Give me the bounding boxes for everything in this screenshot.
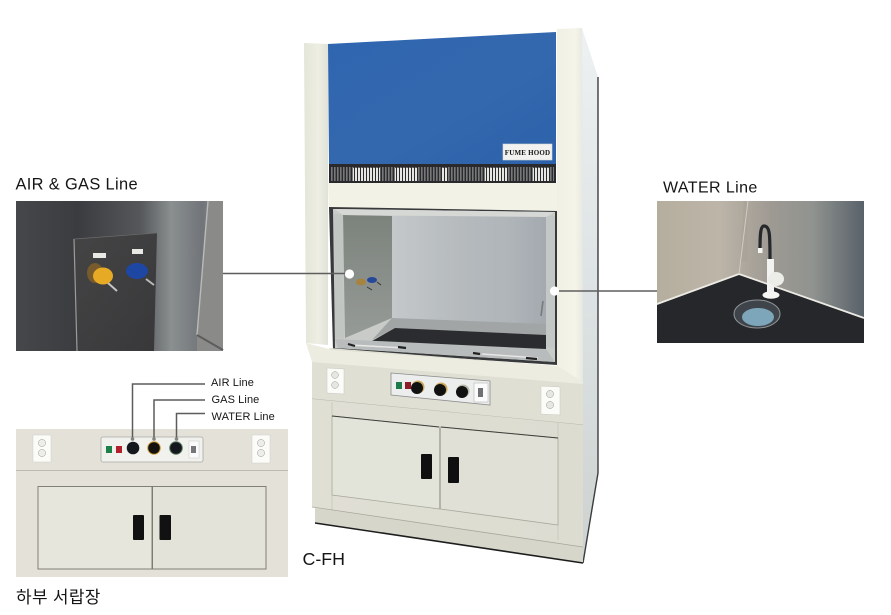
door handle right — [448, 457, 459, 483]
blue valve — [126, 263, 154, 285]
callout label: WATER Line: WATER Line — [212, 411, 275, 423]
plinth — [315, 508, 583, 563]
detail handle left — [133, 515, 144, 540]
photo: lower cabinet detail — [16, 429, 288, 577]
water faucet inside hood — [541, 301, 543, 316]
photo: air and gas valves — [16, 201, 223, 351]
heading: WATER Line: WATER Line — [663, 180, 758, 196]
detail socket right — [252, 435, 270, 463]
model name: C-FH: C-FH — [302, 549, 345, 569]
counter back rails — [657, 201, 748, 311]
caption: lower cabinet: 하부 서랍장 — [16, 588, 101, 607]
blue upper panel — [328, 32, 556, 164]
yellow valve — [87, 263, 117, 291]
sash bottom rail — [335, 339, 555, 362]
door handle left — [421, 454, 432, 479]
connector: water to hood — [550, 286, 658, 296]
connector: air and gas to hood — [223, 269, 354, 279]
photo: water faucet and sink — [657, 201, 864, 343]
nameplate: FUME HOOD — [503, 144, 552, 160]
valve plate — [74, 233, 157, 351]
window back wall — [392, 216, 547, 324]
faucet — [758, 226, 784, 299]
callout label: GAS Line: GAS Line — [212, 394, 259, 406]
window left post — [334, 214, 344, 339]
window left wall — [343, 215, 392, 338]
sink drain — [734, 300, 780, 328]
socket left — [327, 368, 344, 394]
detail control panel — [101, 437, 203, 462]
gas valves inside hood — [356, 277, 381, 290]
detail doors — [38, 486, 266, 569]
heading: AIR & GAS Line: AIR & GAS Line — [16, 176, 138, 194]
control panel — [391, 373, 490, 405]
detail socket left — [33, 435, 51, 462]
detail handle right — [160, 515, 171, 540]
callout lines: AIR, GAS, WATER — [131, 384, 205, 441]
nameplate: FUME HOOD: FUME HOOD — [505, 149, 550, 157]
base cabinet — [312, 399, 583, 547]
black counter — [657, 274, 864, 343]
work surface — [372, 318, 546, 340]
cabinet doors — [332, 416, 558, 525]
right column — [557, 28, 583, 382]
window top rail — [334, 209, 555, 217]
sash window — [329, 207, 557, 365]
service panel — [312, 348, 583, 425]
lintel — [328, 183, 557, 212]
hood side wall — [582, 28, 598, 563]
vent grille — [329, 164, 556, 183]
socket right — [541, 386, 560, 415]
valve labels — [93, 253, 106, 258]
left column — [304, 43, 328, 345]
fume hood cabinet — [304, 28, 598, 563]
window right post — [546, 216, 555, 348]
callout label: AIR Line: AIR Line — [211, 377, 254, 389]
